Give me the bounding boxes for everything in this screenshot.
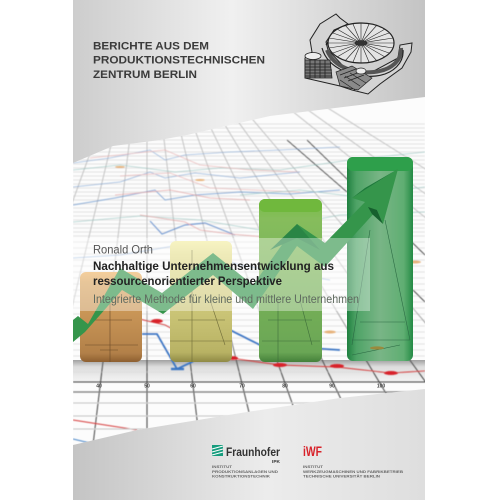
bar chart bbox=[80, 157, 413, 362]
icon: Fraunhofer mark bbox=[212, 445, 223, 456]
logo: Fraunhofer IPK bbox=[212, 445, 281, 478]
logo: IWF: iWF bbox=[303, 443, 322, 459]
translucent title panel bbox=[73, 238, 370, 311]
logo: IWF: TECHNISCHE UNIVERSITÄT BERLIN bbox=[303, 474, 380, 478]
book title: ressourcenorientierter Perspektive bbox=[93, 274, 282, 288]
logo: Fraunhofer IPK: PRODUKTIONSANLAGEN UND bbox=[212, 470, 278, 474]
logo: IWF bbox=[303, 443, 403, 478]
icon: production technology centre building bbox=[305, 14, 412, 94]
cover background bbox=[73, 0, 425, 500]
series heading: BERICHTE AUS DEM bbox=[93, 40, 209, 52]
logo: Fraunhofer IPK: Fraunhofer bbox=[226, 447, 280, 459]
bar: dark green bbox=[347, 157, 413, 361]
growth arrow bbox=[73, 169, 398, 342]
subtitle: Integrierte Methode für kleine und mittlere Unternehmen bbox=[93, 292, 359, 306]
axis labels: 100 bbox=[377, 384, 385, 390]
axis labels: 70 bbox=[239, 384, 245, 390]
logo: IWF: INSTITUT bbox=[303, 465, 324, 469]
axis labels: 90 bbox=[329, 384, 335, 390]
series heading: PRODUKTIONSTECHNISCHEN bbox=[93, 54, 265, 66]
series heading bbox=[93, 40, 265, 81]
logo: Fraunhofer IPK: KONSTRUKTIONSTECHNIK bbox=[212, 474, 270, 478]
logo: IWF: WERKZEUGMASCHINEN UND FABRIKBETRIEB bbox=[303, 470, 403, 474]
series heading: ZENTRUM BERLIN bbox=[93, 69, 197, 81]
axis labels: 60 bbox=[190, 384, 196, 390]
axis labels bbox=[96, 384, 385, 390]
book title: Nachhaltige Unternehmensentwicklung aus bbox=[93, 259, 334, 273]
axis labels: 50 bbox=[144, 384, 150, 390]
line chart background bbox=[73, 97, 425, 445]
axis labels: 80 bbox=[282, 384, 288, 390]
logo: Fraunhofer IPK: INSTITUT bbox=[212, 465, 233, 469]
bar: orange bbox=[80, 272, 142, 362]
bar: light green bbox=[259, 199, 322, 362]
logo: Fraunhofer IPK: IPK bbox=[272, 459, 281, 464]
author: Ronald Orth bbox=[93, 242, 153, 256]
book title bbox=[93, 259, 334, 288]
bar: yellow bbox=[170, 241, 232, 362]
axis labels: 40 bbox=[96, 384, 102, 390]
